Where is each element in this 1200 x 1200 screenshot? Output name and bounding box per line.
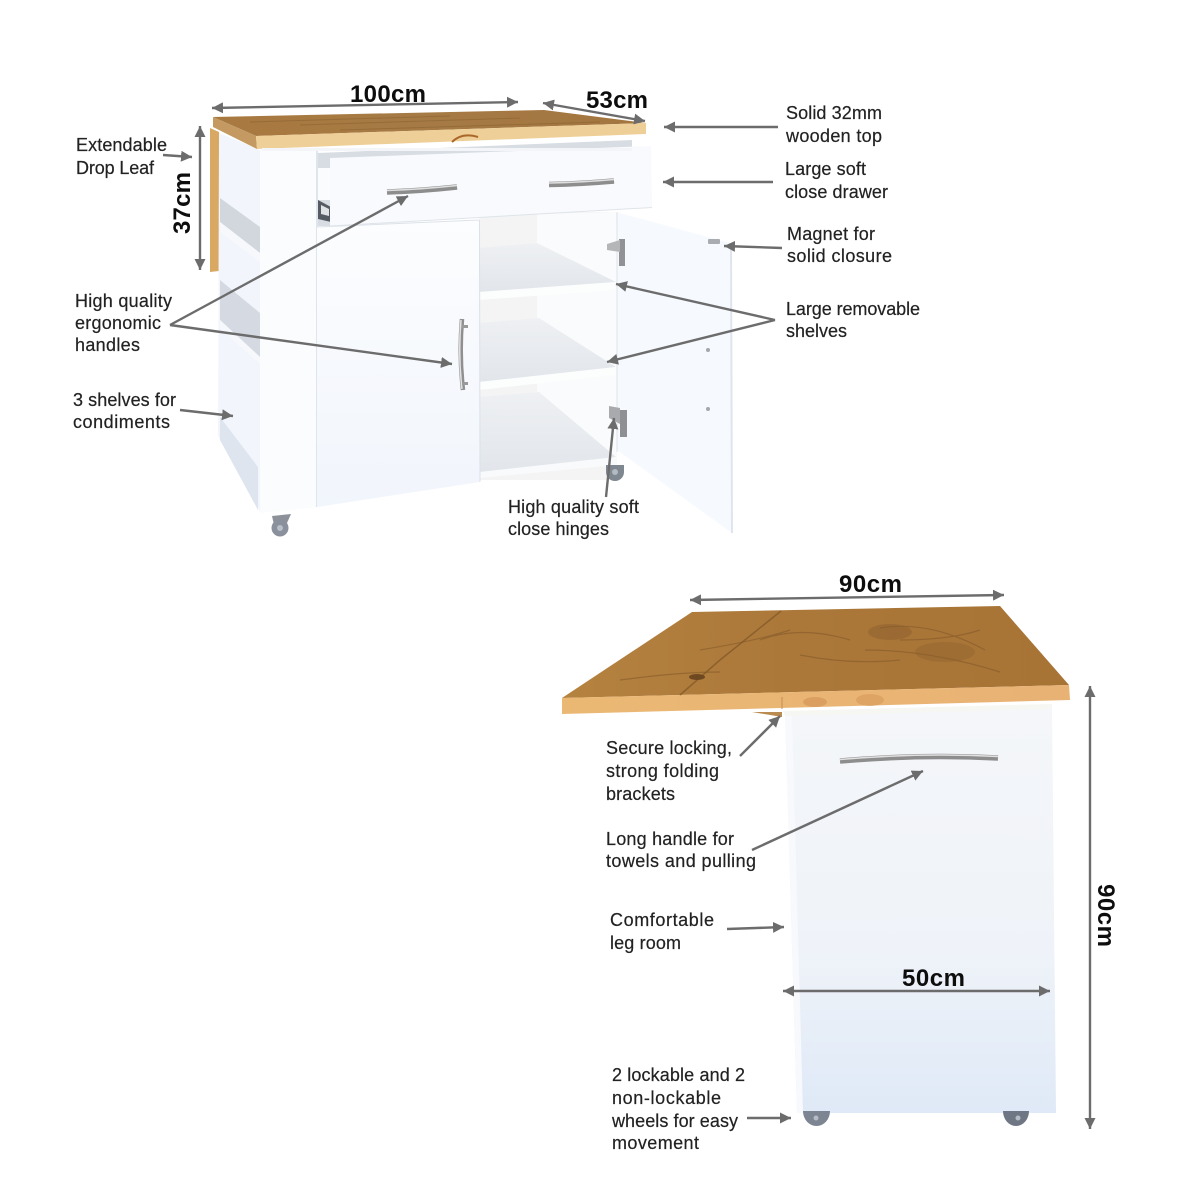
- drop leaf edge: [210, 128, 219, 272]
- callout: wheels: 2 lockable and 2: [612, 1065, 745, 1085]
- dimension: 53cm depth: 53cm: [586, 87, 648, 114]
- cabinet photo: end view with drop leaf raised: [562, 606, 1070, 1126]
- dimension: 100cm width: 100cm: [350, 81, 426, 108]
- shelf 1: [479, 243, 616, 292]
- callout: magnet: [724, 224, 892, 266]
- door handle: [460, 319, 468, 390]
- cabinet photo: front view with open door: [210, 110, 733, 536]
- callout: removable shelves: Large removable: [786, 299, 920, 319]
- hinges: [607, 239, 627, 437]
- callout: long handle: Long handle for: [606, 829, 734, 849]
- callout: removable shelves: shelves: [786, 321, 847, 341]
- callout: wheels: movement: [612, 1133, 699, 1153]
- drawer front: [330, 146, 652, 226]
- caster left: [272, 514, 291, 536]
- shelf 2: [479, 318, 616, 382]
- callout: folding brackets: brackets: [606, 784, 675, 804]
- callout: long handle: [606, 771, 923, 871]
- long handle: [840, 755, 998, 761]
- callout: ergonomic handles: handles: [75, 335, 140, 355]
- callout: long handle: towels and pulling: [606, 851, 756, 871]
- callout: leg room: leg room: [610, 933, 681, 953]
- callout: folding brackets: [606, 716, 780, 804]
- panel highlight: [785, 714, 803, 1113]
- callout: condiment shelves: [73, 390, 233, 432]
- callout: wheels: [611, 1065, 791, 1153]
- left side panel with condiment shelves: [218, 133, 260, 512]
- caster right: [606, 465, 624, 481]
- dimension: 37cm leaf drop: 37cm: [169, 172, 196, 234]
- callout: leg room: Comfortable: [610, 910, 714, 930]
- table top: [562, 606, 1070, 714]
- callout: extendable drop leaf: Extendable: [76, 135, 167, 155]
- dimension: 50cm depth: 50cm: [902, 965, 965, 992]
- folding bracket: [752, 712, 782, 717]
- callout: wheels: wheels for easy: [611, 1111, 738, 1131]
- callout: soft close drawer: [663, 159, 888, 202]
- screw marks: [706, 348, 710, 352]
- dimension: 90cm leaf width: [690, 571, 1004, 600]
- callout: folding brackets: strong folding: [606, 761, 719, 781]
- callout: magnet: Magnet for: [787, 224, 875, 244]
- callout: soft close drawer: close drawer: [785, 182, 888, 202]
- drawer opening: [318, 140, 632, 226]
- callout: condiment shelves: condiments: [73, 412, 170, 432]
- dimension: 100cm width: [212, 81, 518, 108]
- left door: [317, 220, 480, 507]
- callout: wooden top: [664, 103, 882, 146]
- callout: extendable drop leaf: Drop Leaf: [76, 158, 155, 178]
- open right door: [616, 212, 732, 533]
- callout: wooden top: Solid 32mm: [786, 103, 882, 123]
- callout: soft close hinges: [508, 418, 639, 539]
- interior compartment: [479, 212, 617, 480]
- dimension: 90cm height: 90cm: [1092, 884, 1119, 947]
- drawer runner: [318, 168, 331, 222]
- callout: ergonomic handles: High quality: [75, 291, 172, 311]
- callout: removable shelves: [607, 284, 920, 362]
- callout: wooden top: wooden top: [785, 126, 882, 146]
- counter top: [213, 110, 646, 151]
- wheels: [803, 1111, 1029, 1126]
- callout: soft close drawer: Large soft: [785, 159, 866, 179]
- callout: ergonomic handles: [75, 196, 452, 364]
- callout: folding brackets: Secure locking,: [606, 738, 732, 758]
- magnet: [708, 239, 720, 244]
- front stile: [260, 146, 318, 513]
- callout: soft close hinges: close hinges: [508, 519, 609, 539]
- dimension: 90cm leaf width: 90cm: [839, 571, 902, 598]
- dimension: 53cm depth: [543, 87, 648, 121]
- top band: [783, 704, 1052, 716]
- end panel: [785, 707, 1056, 1113]
- callout: ergonomic handles: ergonomic: [75, 313, 161, 333]
- bottom panel: [480, 392, 616, 472]
- callout: leg room: [610, 910, 784, 953]
- callout: condiment shelves: 3 shelves for: [73, 390, 176, 410]
- callout: magnet: solid closure: [787, 246, 892, 266]
- callout: soft close hinges: High quality soft: [508, 497, 639, 517]
- callout: wheels: non-lockable: [612, 1088, 721, 1108]
- drawer handles: [387, 180, 614, 192]
- callout: extendable drop leaf: [76, 135, 192, 178]
